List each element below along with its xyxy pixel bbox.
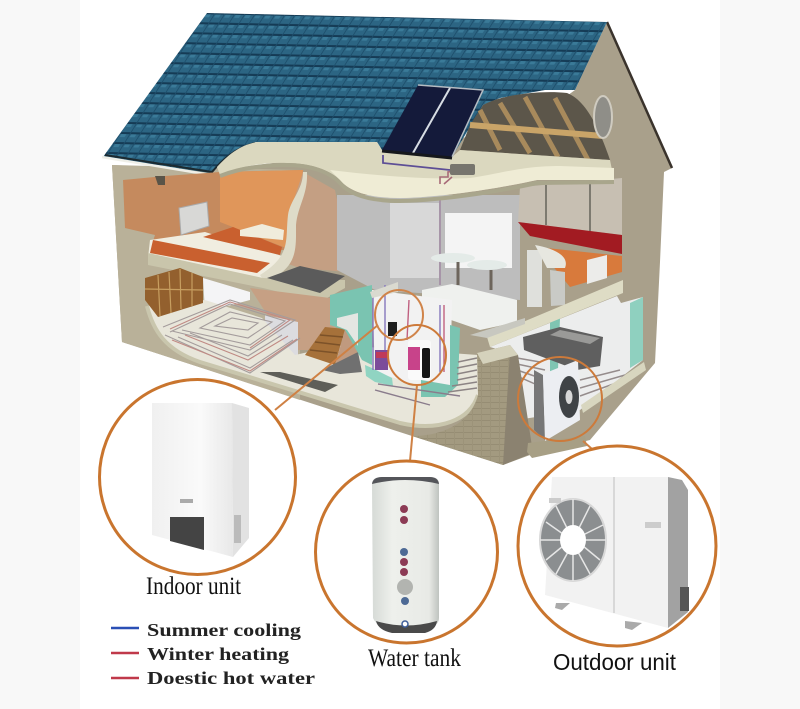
towel rail bbox=[527, 250, 542, 307]
concrete pad bbox=[527, 436, 587, 458]
side connectors bbox=[680, 587, 689, 611]
lower room back wall bbox=[203, 278, 250, 312]
upper right floor slab bbox=[487, 280, 623, 347]
small outdoor unit bbox=[534, 360, 580, 441]
water tank product bbox=[372, 477, 439, 633]
hot water cylinder bbox=[408, 340, 431, 380]
label: water tank: Water tank bbox=[368, 645, 461, 672]
floor drain bbox=[260, 372, 338, 392]
cream attic floor plate bbox=[217, 142, 614, 198]
underfloor heating coils bbox=[163, 300, 300, 373]
round attic window bbox=[594, 96, 612, 138]
white eave strip bbox=[102, 157, 217, 176]
right eave edge bbox=[607, 22, 672, 168]
leader line: water tank bbox=[410, 385, 417, 461]
wooden cabinets bbox=[145, 268, 203, 317]
bathtub bbox=[422, 284, 517, 330]
wall radiator bbox=[179, 202, 209, 235]
control box bbox=[388, 322, 397, 336]
house cutaway illustration bbox=[102, 13, 672, 465]
purple manifold bbox=[375, 350, 388, 370]
floor coils center bbox=[448, 358, 477, 392]
marker circle: water tank on house bbox=[388, 325, 446, 385]
solar control box bbox=[450, 164, 475, 175]
legend: domestic hot water: Doestic hot water bbox=[147, 668, 315, 688]
panel: indoor unit bbox=[100, 380, 296, 574]
fan grille bbox=[540, 499, 606, 581]
teal utility room bbox=[330, 282, 460, 405]
solar panel bbox=[382, 85, 483, 184]
panel: water tank bbox=[316, 461, 498, 643]
lower right room bbox=[490, 296, 646, 420]
panel: outdoor unit bbox=[518, 446, 716, 646]
solar pipes bbox=[383, 155, 450, 170]
upper left bedroom bbox=[123, 170, 303, 280]
leader line: outdoor unit bbox=[583, 441, 592, 449]
centre brick pier bbox=[412, 345, 527, 465]
washbasins bbox=[431, 253, 475, 263]
leader line: indoor unit bbox=[275, 325, 378, 410]
stairs bbox=[305, 327, 362, 374]
bathroom back walls bbox=[337, 195, 542, 330]
marker circle: indoor unit on house bbox=[375, 290, 423, 340]
attic with rafters bbox=[460, 92, 610, 160]
lighter ceiling shelf bbox=[330, 166, 614, 198]
control panel bbox=[170, 517, 204, 550]
outdoor unit product bbox=[540, 477, 689, 630]
legend bbox=[111, 620, 315, 688]
interior partition bbox=[282, 172, 347, 272]
floor coils right bbox=[517, 358, 630, 396]
indoor unit product bbox=[152, 403, 249, 557]
sofa box bbox=[523, 327, 603, 370]
upper floor slab bbox=[148, 253, 345, 302]
ground floor bbox=[147, 300, 478, 426]
house walls bbox=[112, 22, 672, 465]
feet bbox=[555, 603, 570, 610]
upper right bedroom bbox=[518, 178, 622, 306]
marker circle: outdoor unit on house bbox=[518, 357, 602, 441]
label: indoor unit: Indoor unit bbox=[146, 573, 241, 600]
dark upper landing floor bbox=[267, 266, 345, 293]
label: outdoor unit: Outdoor unit bbox=[553, 649, 677, 675]
legend: summer cooling: Summer cooling bbox=[147, 620, 301, 640]
roof bbox=[103, 13, 607, 173]
bed bbox=[240, 224, 284, 240]
legend: winter heating: Winter heating bbox=[147, 644, 289, 664]
